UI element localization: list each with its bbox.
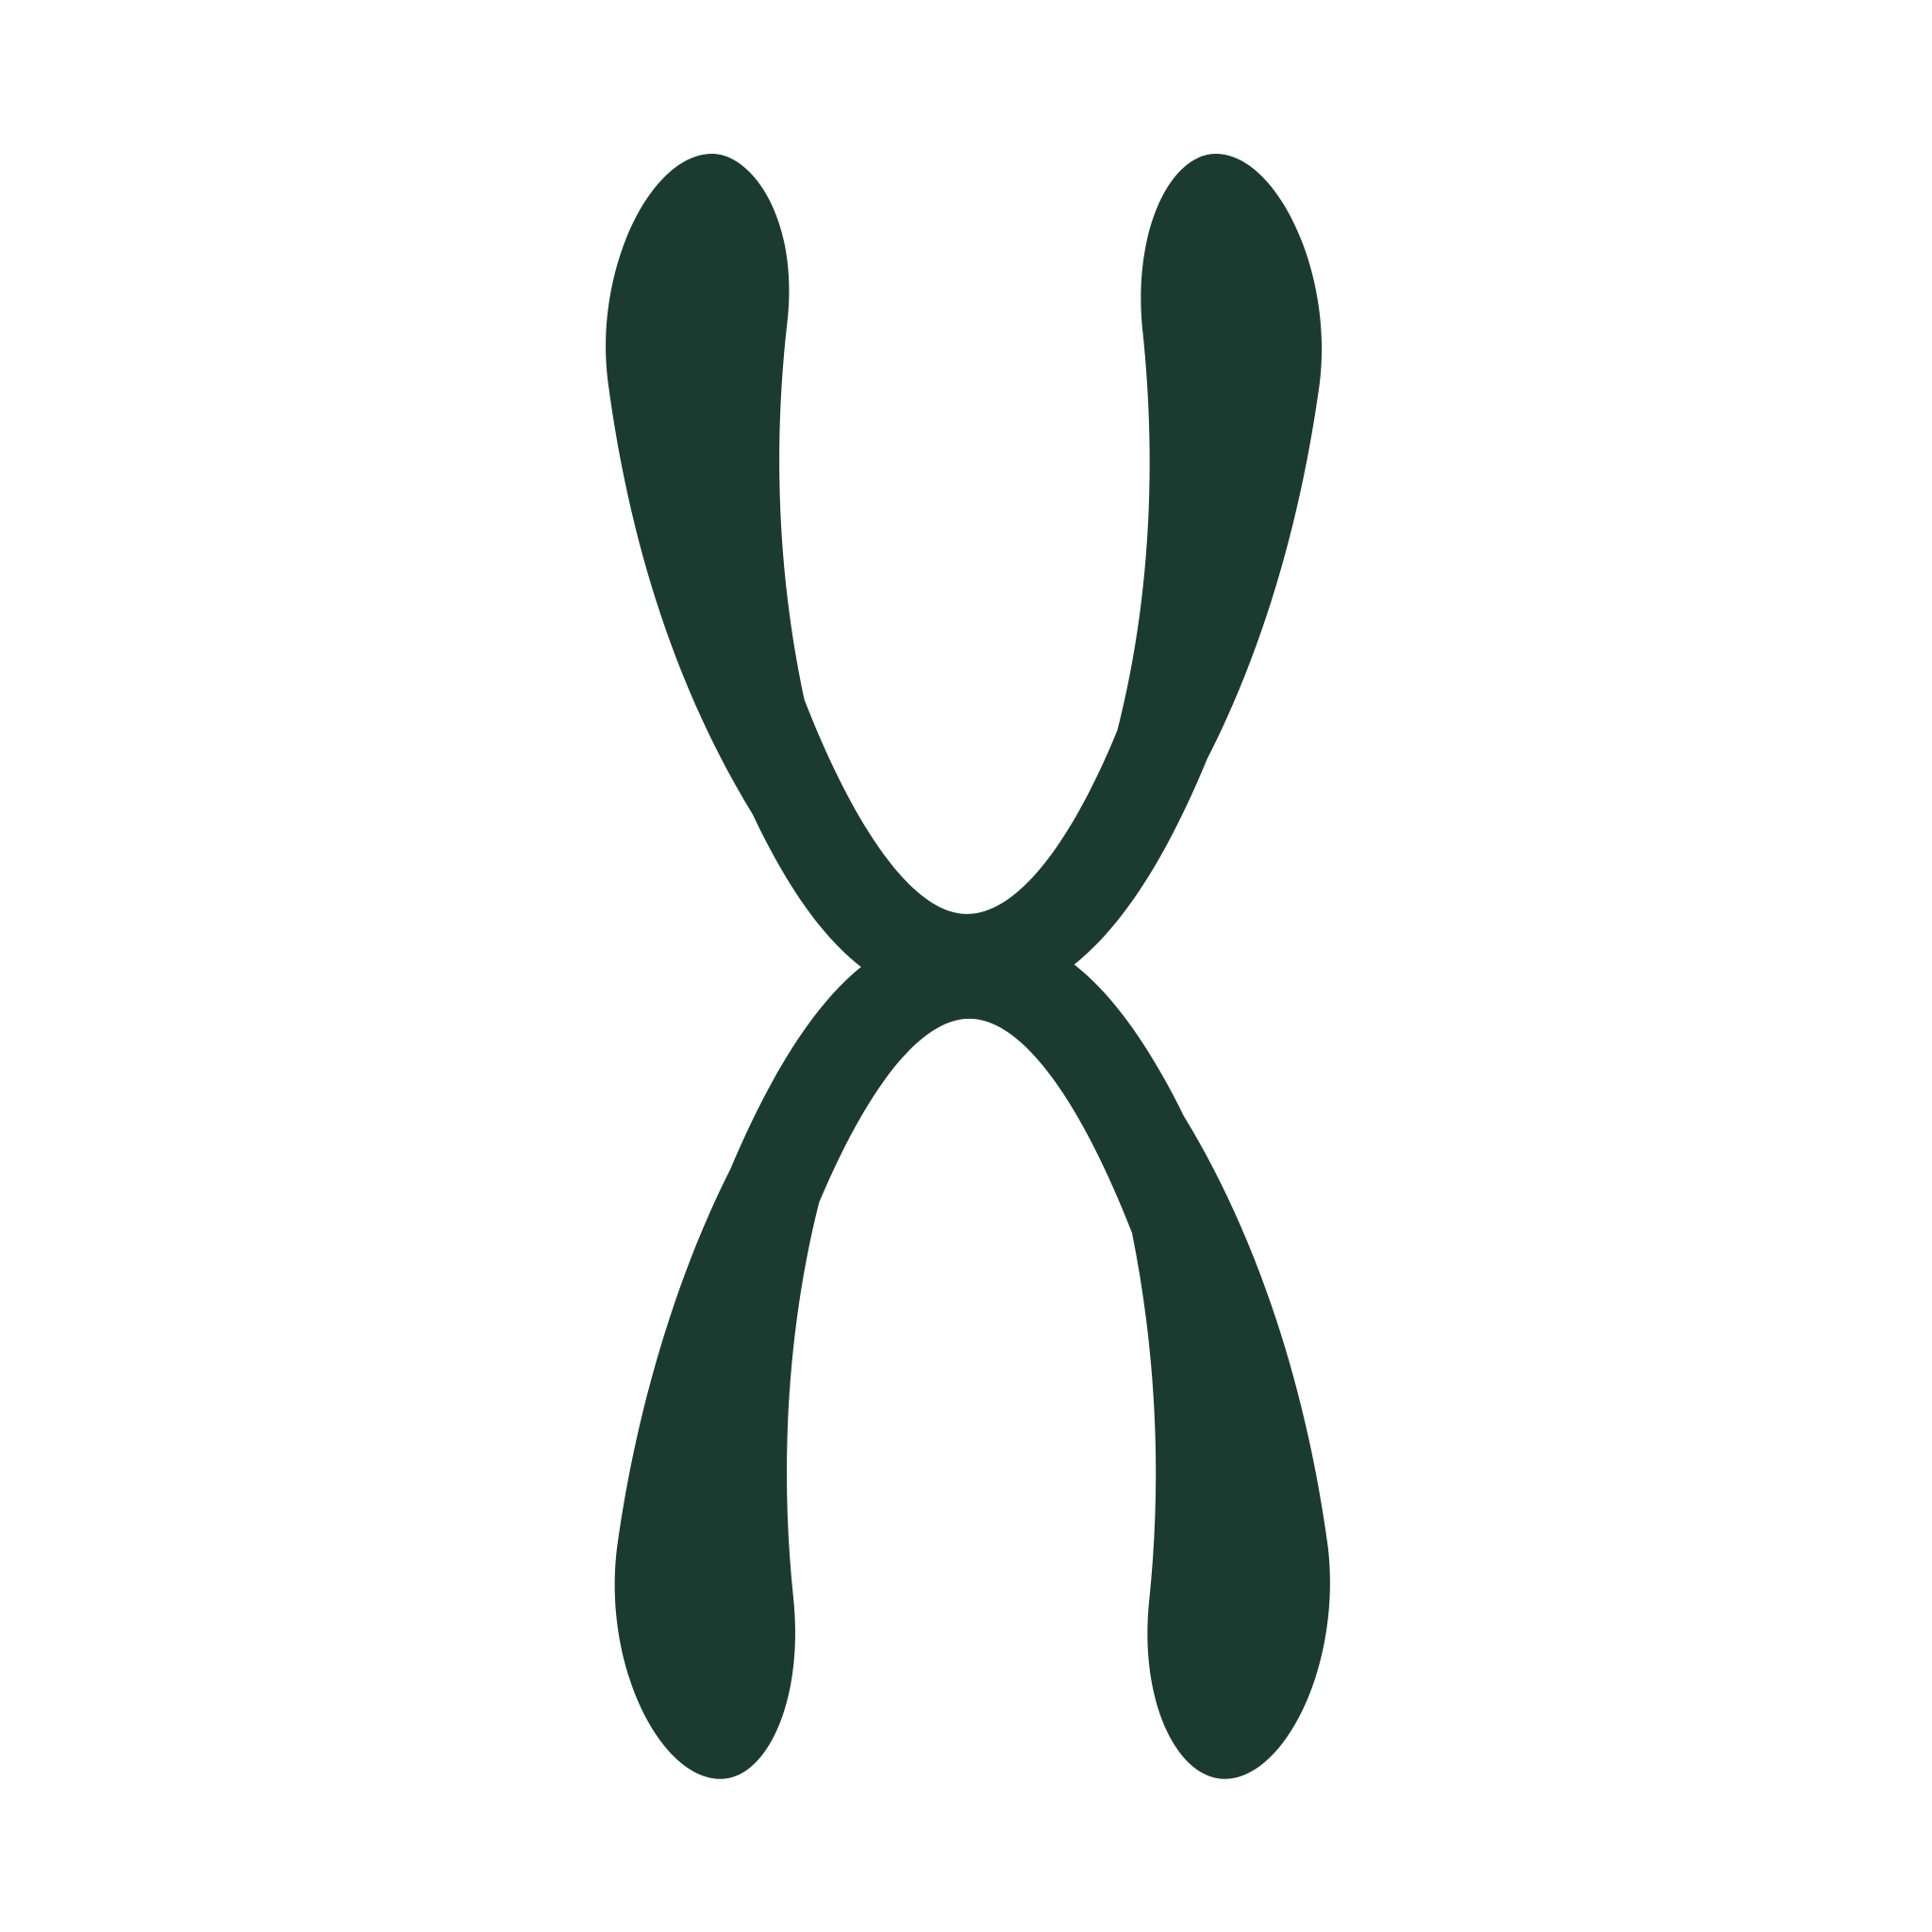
icon: chromosome [606, 154, 1330, 1779]
